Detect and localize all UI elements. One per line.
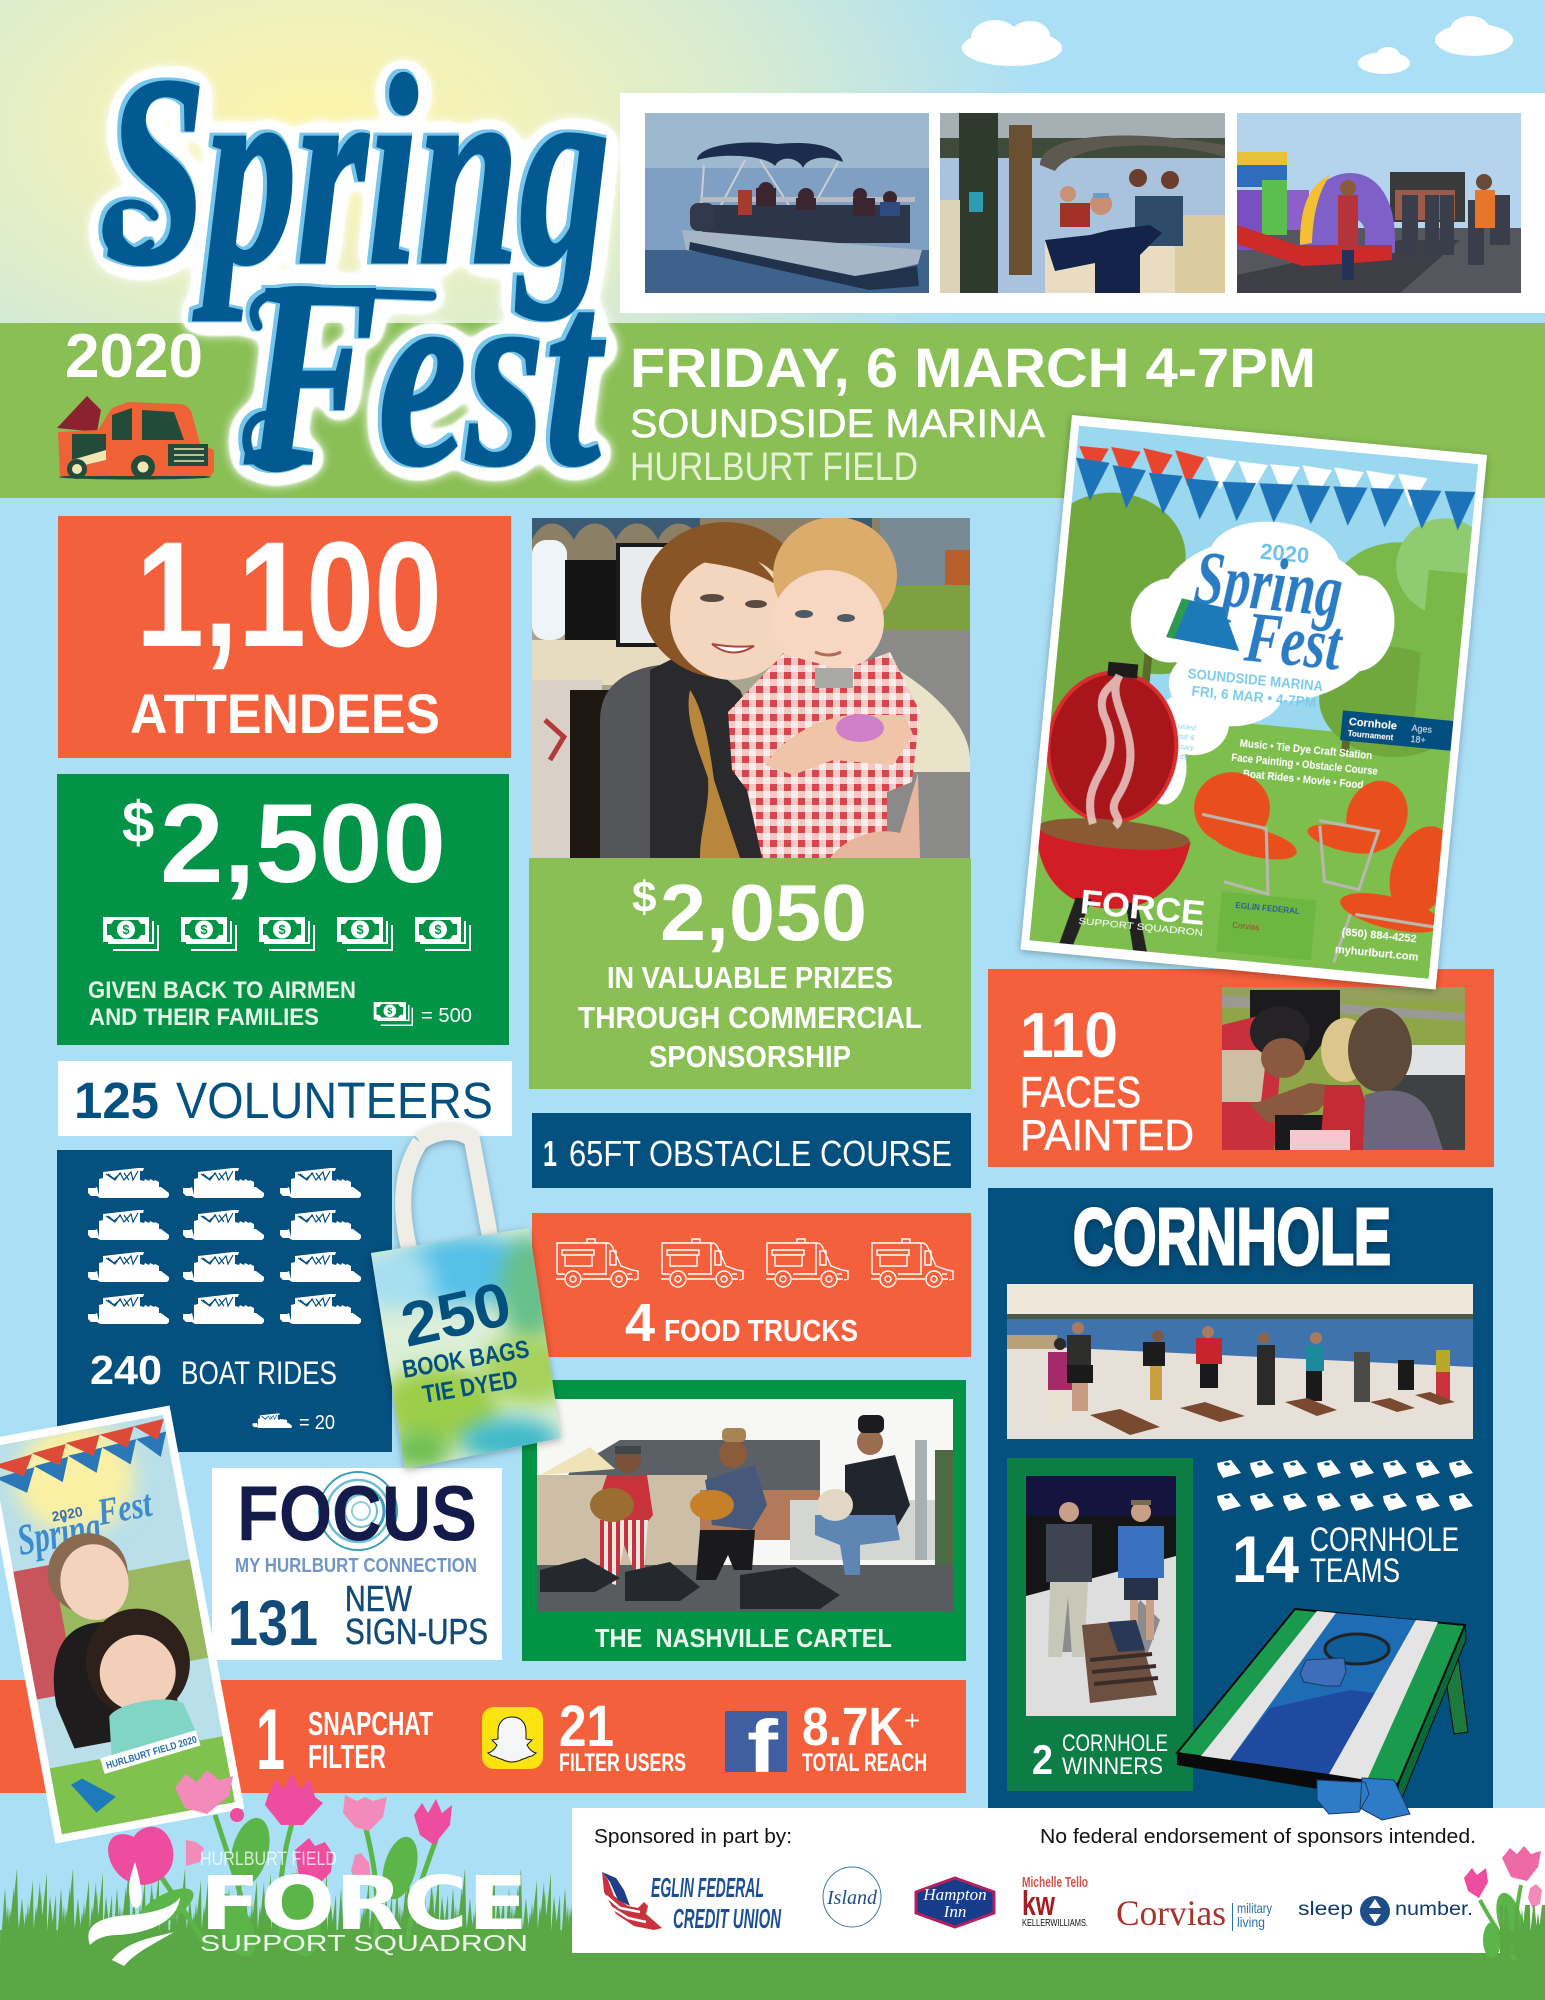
panel: cornhole winners (1007, 1458, 1193, 1791)
photo: pontoon boat on water (645, 113, 929, 293)
panel: social media band: FILTER (308, 1738, 386, 1775)
logo: Corvias: military (1237, 1900, 1272, 1916)
photo: inflatable obstacle course and crowd (1237, 113, 1521, 293)
icon: facebook (725, 1705, 787, 1788)
panel: boat rides: 240 (90, 1347, 162, 1393)
green date band (0, 323, 1545, 498)
poster cloud (1130, 522, 1395, 805)
panel: FOCUS sign-ups: NEW (345, 1578, 412, 1619)
panel: social media band: FILTER USERS (559, 1749, 686, 1777)
panel: boat rides: BOAT RIDES (181, 1355, 337, 1391)
logo: Hampton Inn: Inn (943, 1902, 966, 1921)
logo: Eglin Federal Credit Union: CREDIT UNION (673, 1903, 781, 1934)
panel: volunteers: VOLUNTEERS (176, 1072, 493, 1129)
logo: Corvias: Corvias (1116, 1893, 1226, 1933)
panel: food trucks: FOOD TRUCKS (664, 1313, 858, 1348)
poster logo text (1188, 544, 1344, 708)
photo: beach cornhole game (1007, 1284, 1473, 1439)
panel: prize value: 2,050 (660, 868, 867, 957)
panel: cornhole (988, 1188, 1493, 1820)
poster sponsors (1216, 892, 1317, 960)
event date and location (630, 336, 1316, 489)
illustration: cornhole board (1177, 1609, 1468, 1820)
poster: Spring Fest flyer: Shuttle provided (1145, 720, 1197, 732)
icon: facebook: f (747, 1705, 778, 1788)
poster: Spring Fest flyer: Parking Lots (1148, 751, 1188, 762)
title: Spring Fest: Spring (105, 20, 610, 322)
poster logo text: Spring (1191, 536, 1346, 634)
poster activities (1232, 739, 1378, 788)
bag straps (403, 1132, 490, 1252)
panel: attendees: 1,100 (136, 510, 442, 678)
poster sponsors: Corvias (1232, 921, 1260, 932)
poster: Spring Fest flyer: (850) 884-4252 (1341, 926, 1417, 945)
panel: money given back: GIVEN BACK TO AIRMEN (88, 977, 356, 1004)
panel: social media band (0, 1680, 966, 1793)
logo: Sleep Number: sleep (1298, 1899, 1353, 1920)
panel: money given back: = 500 (421, 1005, 472, 1027)
snapchat filter frame: 2020 (50, 1503, 84, 1525)
panel: social media band: 21 (559, 1694, 614, 1759)
icons: cornhole team boards (1217, 1460, 1473, 1511)
icon: snapchat (482, 1707, 543, 1769)
panel: FOCUS sign-ups: SIGN-UPS (345, 1611, 488, 1652)
logo: Keller Williams: kw (1022, 1885, 1055, 1923)
clouds (962, 16, 1513, 74)
grass (0, 1860, 1545, 2000)
text: cornhole teams: CORNHOLE (1310, 1521, 1459, 1559)
panel: food trucks (532, 1213, 971, 1357)
logo: Sleep Number: number. (1395, 1899, 1473, 1920)
poster chairs (1194, 772, 1443, 933)
poster: Spring Fest flyer: from Mini Mall & (1144, 730, 1195, 742)
panel: faces painted: PAINTED (1020, 1111, 1194, 1160)
heading: cornhole: CORNHOLE (1073, 1192, 1391, 1281)
panel: obstacle course (532, 1113, 971, 1188)
logo: Force Support Squadron: SUPPORT SQUADRON (200, 1930, 528, 1956)
poster logo text: Fest (1241, 597, 1346, 686)
poster: Spring Fest flyer: myhurlburt.com (1334, 944, 1419, 964)
panel: boat rides (57, 1150, 392, 1452)
panel: social media band: 8.7K (802, 1697, 903, 1757)
logo: Force Support Squadron: FORCE (200, 1861, 528, 1947)
text: cornhole teams: TEAMS (1310, 1552, 1400, 1590)
event date and location: FRIDAY, 6 MARCH 4-7PM (630, 336, 1316, 399)
tote bag: 250 book bags: 250 (395, 1269, 517, 1361)
logo: Hampton Inn: Hampton (922, 1885, 987, 1904)
snapchat filter frame: HURLBURT FIELD 2020 (105, 1734, 199, 1772)
snapchat filter frame (0, 1405, 244, 1844)
panel: prize value (529, 858, 971, 1089)
panel: social media band: + (904, 1705, 920, 1736)
poster bunting (1076, 446, 1476, 530)
icon: red food truck (57, 396, 214, 480)
logo: Sleep Number (1298, 1896, 1473, 1926)
snapchat filter frame: Fest (93, 1483, 156, 1534)
flowers (108, 1770, 452, 1963)
panel: prize value: SPONSORSHIP (649, 1039, 851, 1074)
panel: money given back: $ (122, 790, 154, 855)
title: Spring Fest: Fest (242, 228, 607, 521)
text: cornhole teams (1232, 1521, 1459, 1596)
poster activities: Face Painting • Obstacle Course (1231, 752, 1378, 778)
photo: two winners with board (1026, 1476, 1176, 1716)
icon: FOCUS swirl (319, 1472, 397, 1550)
logo: Island (823, 1867, 881, 1927)
panel: obstacle course: 65FT OBSTACLE COURSE (569, 1133, 952, 1174)
panel: faces painted (988, 969, 1494, 1167)
event date and location: SOUNDSIDE MARINA (630, 402, 1045, 446)
poster tag: Ages (1411, 723, 1433, 735)
photo: man waving on boat at dock (940, 113, 1225, 293)
poster mini cornhole (1165, 597, 1244, 651)
poster logo text: SOUNDSIDE MARINA (1187, 665, 1324, 695)
logo: Force Support Squadron (88, 1849, 528, 1966)
icon: swoosh and flame (88, 1862, 180, 1966)
panel: attendees (58, 510, 511, 758)
panel: prize value: IN VALUABLE PRIZES (607, 960, 893, 995)
logo: Eglin Federal Credit Union: EGLIN FEDERAL (651, 1872, 764, 1903)
flowers and grass at right edge (1464, 1846, 1545, 1960)
poster logo text: FRI, 6 MAR • 4-7PM (1191, 683, 1317, 712)
poster: Spring Fest flyer (991, 412, 1503, 991)
panel: FOCUS sign-ups: MY HURLBURT CONNECTION (235, 1555, 477, 1577)
panel: FOCUS sign-ups (212, 1468, 502, 1660)
poster tag: 18+ (1410, 734, 1426, 745)
logo: Force Support Squadron: HURLBURT FIELD (200, 1849, 337, 1870)
panel: boat rides: = 20 (299, 1412, 335, 1434)
logo: Keller Williams: KELLERWILLIAMS. (1022, 1918, 1088, 1929)
panel: money given back: 2,500 (160, 781, 446, 906)
poster grill (1038, 662, 1191, 952)
poster trees (1051, 492, 1472, 757)
photo: face painting (1222, 987, 1465, 1153)
logo: Keller Williams: Michelle Tello (1022, 1874, 1088, 1891)
poster: Spring Fest flyer: BX/Commissary (1143, 740, 1194, 752)
logo: Corvias: living (1237, 1914, 1265, 1930)
panel: sponsors: Sponsored in part by: (594, 1826, 792, 1848)
poster tag: Cornhole (1348, 716, 1397, 733)
poster force logo: FORCE (1079, 883, 1207, 933)
tote bag: 250 book bags (355, 1132, 580, 1470)
poster logo text: 2020 (1259, 539, 1310, 568)
panel: sponsors: No federal endorsement of sponsors intended. (1040, 1826, 1476, 1848)
photo: band on stage (537, 1399, 953, 1612)
title swashes (107, 204, 432, 468)
panel: obstacle course: 1 (543, 1133, 557, 1174)
poster activities: Boat Rides • Movie • Food (1242, 768, 1364, 792)
poster activities: Music • Tie Dye Craft Station (1239, 738, 1373, 762)
logo: Hampton Inn (916, 1878, 994, 1927)
panel: cornhole winners: 2 (1032, 1736, 1053, 1783)
title: Spring Fest (105, 20, 610, 521)
panel: social media band: SNAPCHAT (308, 1705, 433, 1742)
panel: prize value: THROUGH COMMERCIAL (578, 1000, 922, 1035)
tote bag: 250 book bags: BOOK BAGS (400, 1335, 531, 1384)
panel: faces painted: FACES (1020, 1068, 1141, 1117)
panel: prize photo of mother and child (532, 517, 970, 860)
panel: faces painted: 110 (1020, 999, 1118, 1071)
panel: food trucks: 4 (625, 1293, 655, 1353)
panel: social media band: TOTAL REACH (802, 1749, 927, 1777)
panel: volunteers: 125 (74, 1072, 159, 1129)
logo: Keller Williams (1022, 1874, 1088, 1929)
panel: FOCUS sign-ups: FOCUS (237, 1469, 477, 1557)
panel: money given back: AND THEIR FAMILIES (89, 1004, 319, 1031)
poster tag (1340, 710, 1453, 751)
logo: Island: Island (826, 1887, 878, 1909)
poster force logo: SUPPORT SQUADRON (1078, 916, 1203, 938)
panel: sponsors (572, 1808, 1545, 1953)
text: cornhole teams: 14 (1232, 1522, 1299, 1596)
panel: prize value: $ (632, 873, 656, 922)
panel: attendees: ATTENDEES (130, 682, 440, 745)
event date and location: HURLBURT FIELD (630, 445, 918, 489)
snapchat filter frame: Spring (13, 1501, 105, 1565)
panel: volunteers (58, 1061, 512, 1136)
poster tag: Tournament (1347, 729, 1394, 742)
white photo strip (620, 93, 1545, 313)
panel: FOCUS sign-ups: 131 (228, 1587, 318, 1659)
panel: the Nashville Cartel band (522, 1380, 966, 1661)
logo: Eglin Federal Credit Union (602, 1872, 781, 1934)
panel: money given back (57, 774, 509, 1045)
panel: cornhole winners: CORNHOLE (1062, 1730, 1168, 1757)
panel: cornhole winners: WINNERS (1062, 1753, 1163, 1780)
panel: the Nashville Cartel band: THE NASHVILLE CARTEL (595, 1623, 892, 1653)
text: 2020: 2020 (65, 322, 203, 391)
panel: social media band: 1 (256, 1692, 285, 1788)
tote bag: 250 book bags: TIE DYED (420, 1365, 520, 1409)
poster sponsors: EGLIN FEDERAL (1235, 901, 1300, 916)
